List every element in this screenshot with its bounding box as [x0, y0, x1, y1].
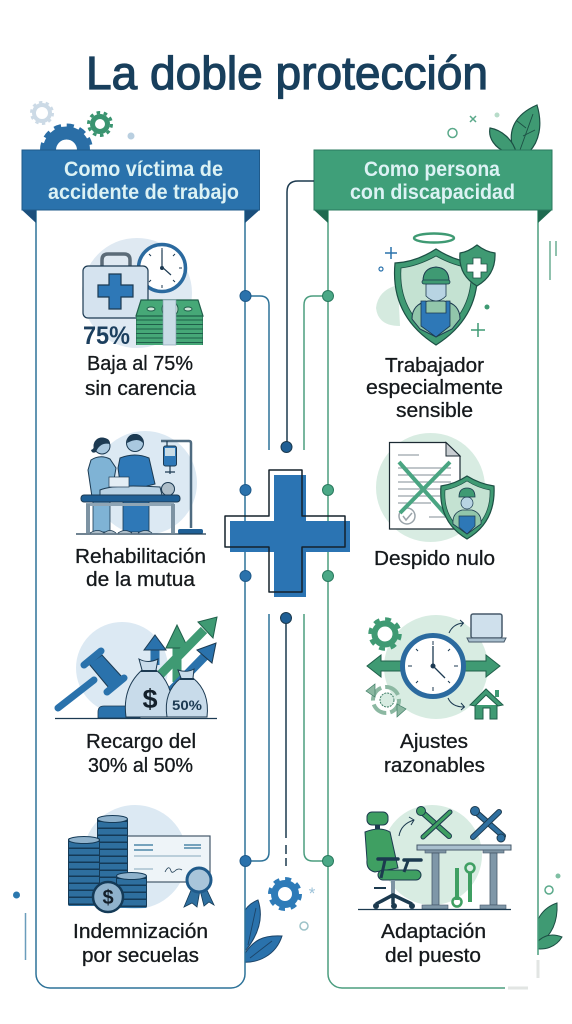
icon: first aid kit, clock and money — [82, 238, 203, 350]
icon: first aid kit, clock and money: 75% — [83, 322, 130, 350]
label: Rehabilitación de la mutua: de la mutua — [86, 569, 196, 591]
panel box — [328, 205, 538, 988]
icon: chair, desk and tools — [358, 805, 511, 910]
label: Indemnización por secuelas: Indemnización — [73, 921, 208, 943]
decorative side marks — [13, 241, 556, 960]
desk — [417, 845, 511, 909]
panel: right column — [314, 150, 552, 988]
label: Rehabilitación de la mutua: Rehabilitación — [75, 546, 206, 568]
label: Baja al 75% sin carencia: sin carencia — [85, 378, 197, 400]
ribbon heading: Como víctima de — [64, 158, 223, 181]
icon: coins, cheque and rosette: $ — [102, 887, 114, 909]
icon: rehabilitation scene — [76, 431, 206, 535]
therapist one — [88, 438, 116, 533]
ribbon heading: accidente de trabajo — [48, 181, 239, 204]
icon: bottom gear and small marks — [270, 879, 316, 930]
ribbon heading: Como persona — [364, 158, 500, 181]
label: Ajustes razonables: razonables — [384, 755, 485, 777]
label: Adaptación del puesto: Adaptación — [381, 921, 486, 943]
icon: bottom blue leaves — [239, 900, 282, 962]
icon: gavel, money bags and rising arrows — [55, 617, 217, 718]
ribbon heading — [314, 150, 552, 223]
panel box — [36, 205, 245, 988]
icon: bottom green leaves — [532, 874, 562, 949]
label: Baja al 75% sin carencia — [85, 353, 197, 400]
label: Adaptación del puesto: del puesto — [385, 945, 481, 967]
ribbon heading: con discapacidad — [350, 181, 515, 204]
icon: gavel, money bags and rising arrows: 50% — [172, 697, 203, 713]
tools — [416, 806, 505, 906]
label: Adaptación del puesto — [381, 921, 486, 967]
icon: central plus — [225, 470, 350, 597]
label: Trabajador especialmente sensible: Trabajador — [385, 355, 484, 377]
icon: clock with flexible arrows — [366, 614, 506, 719]
label: Recargo del 30% al 50%: Recargo del — [86, 731, 196, 753]
icon: crossed-out document and shield — [376, 433, 494, 542]
title: La doble protección — [86, 47, 488, 99]
chair — [365, 812, 421, 909]
label: Baja al 75% sin carencia: Baja al 75% — [87, 353, 193, 375]
label: Trabajador especialmente sensible: sensible — [396, 400, 473, 422]
label: Despido nulo: Despido nulo — [374, 548, 495, 570]
label: Rehabilitación de la mutua — [75, 546, 206, 591]
icon: coins, cheque and rosette — [68, 805, 214, 912]
label: Indemnización por secuelas — [73, 921, 208, 967]
label: Ajustes razonables: Ajustes — [400, 731, 468, 753]
icon: gavel, money bags and rising arrows: $ — [142, 684, 158, 714]
therapist two — [118, 434, 155, 533]
label: Trabajador especialmente sensible — [366, 355, 503, 422]
icon: top right leaves and dots — [448, 105, 540, 152]
panel: left column — [22, 150, 260, 988]
connectors: circuit lines linking the panels to the cross — [240, 181, 334, 866]
label: Trabajador especialmente sensible: especialmente — [366, 377, 503, 399]
label: Indemnización por secuelas: por secuelas — [82, 945, 199, 967]
icon: bottom gear and small marks: * — [309, 884, 316, 903]
icon: worker in shield — [376, 234, 495, 345]
label: Recargo del 30% al 50%: 30% al 50% — [88, 755, 193, 777]
label: Ajustes razonables — [384, 731, 485, 777]
icon: top left gears — [32, 102, 134, 174]
faded corner smudge — [508, 960, 538, 988]
ribbon heading — [22, 150, 260, 223]
label: Recargo del 30% al 50% — [86, 731, 196, 777]
